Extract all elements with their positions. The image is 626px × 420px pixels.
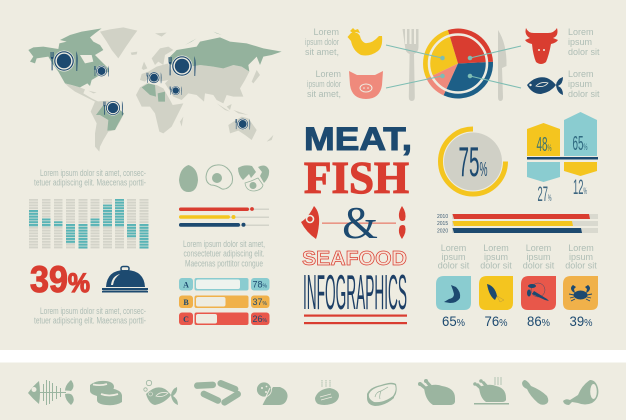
- squid card: dolor sit: [480, 260, 512, 270]
- title: ampersand with fish: &: [342, 197, 378, 248]
- squid card: [479, 243, 513, 329]
- icon: fish with bubbles: [144, 380, 178, 405]
- icon: raw steak: [367, 383, 397, 406]
- hexagon chart: 27%: [538, 183, 552, 206]
- icon: fork: [402, 29, 418, 101]
- text block: lower left: [34, 306, 146, 326]
- text block: middle: Lorem ipsum dolor sit amet,: [183, 239, 265, 249]
- icon: fish: [527, 77, 563, 95]
- row A meter: A: [183, 280, 189, 290]
- text block: middle: [183, 239, 265, 268]
- icon: salami: [256, 382, 288, 405]
- labels: chicken: Lorem: [313, 27, 339, 37]
- crab card: Lorem: [568, 243, 594, 253]
- text block: lower left: tetuer adipiscing elit. Maecenas portti-: [34, 316, 146, 326]
- row A meter: [179, 278, 270, 290]
- white band: [0, 350, 626, 362]
- shrimp card: 65%: [442, 313, 465, 329]
- crab card: dolor sit: [565, 260, 597, 270]
- year bars chart: [437, 214, 598, 234]
- squid card: 76%: [484, 313, 508, 329]
- icon: sausages: [194, 379, 242, 407]
- crab card: [563, 243, 598, 329]
- icon: fish steaks: [90, 381, 122, 405]
- donut chart 75%: 75%: [458, 138, 488, 185]
- icon: roast chicken: [418, 379, 455, 405]
- donut chart 75%: [440, 129, 506, 194]
- title: fish: FISH: [304, 153, 409, 203]
- icon: pig: [349, 71, 383, 99]
- year bars chart: 2010: [437, 214, 448, 220]
- lobster card: 86%: [527, 313, 550, 329]
- equalizer bar chart: [29, 199, 148, 249]
- lobster card: ipsum: [526, 252, 551, 262]
- lobster card: Lorem: [526, 243, 551, 253]
- title: seafood: SEAFOOD: [302, 248, 407, 270]
- hexagon chart: 65%: [572, 133, 588, 155]
- shrimp card: ipsum: [441, 252, 466, 262]
- icon: steak with steam: [315, 380, 339, 405]
- big stat 39%: 39%: [30, 259, 90, 300]
- hexagon chart: [527, 112, 598, 206]
- icon: knife: [498, 30, 507, 101]
- text block: middle: Maecenas porttitor congue: [185, 258, 263, 268]
- title: meat: MEAT,: [304, 121, 412, 157]
- icon: fish skeleton: [28, 380, 74, 405]
- labels: pig: [307, 69, 341, 99]
- year bars chart: 2020: [437, 228, 448, 234]
- row A meter: 78%: [252, 280, 268, 290]
- icon: serving cloche: [102, 266, 148, 292]
- crab card: ipsum: [569, 252, 593, 262]
- squid card: ipsum: [484, 252, 508, 262]
- labels: cow: dolor sit: [568, 47, 600, 57]
- text block: upper left: [34, 168, 146, 188]
- icon: drumstick: [522, 380, 548, 405]
- squid card: Lorem: [483, 243, 509, 253]
- connector lines: [386, 45, 521, 88]
- hexagon chart: 48%: [536, 134, 552, 156]
- labels: pig: ipsum dolor: [307, 79, 341, 89]
- labels: fish: dolor sit: [568, 89, 600, 99]
- labels: fish: Lorem: [568, 69, 594, 79]
- hexagon chart: 12%: [573, 176, 587, 199]
- shrimp card: Lorem: [441, 243, 466, 253]
- icon: ham: [563, 380, 598, 405]
- labels: chicken: [305, 27, 339, 57]
- shrimp card: [436, 243, 471, 329]
- text block: upper left: tetuer adipiscing elit. Maecenas portti-: [34, 178, 146, 188]
- labels: cow: Lorem: [568, 27, 594, 37]
- shrimp card: dolor sit: [438, 260, 470, 270]
- title rules: [304, 314, 407, 324]
- text block: lower left: Lorem ipsum dolor sit amet, consec-: [40, 306, 146, 316]
- year bars chart: 2015: [437, 221, 448, 227]
- row B meter: [179, 296, 270, 308]
- pie chart plate: [423, 28, 493, 99]
- text block: upper left: Lorem ipsum dolor sit amet, consec-: [40, 168, 146, 178]
- icon: chicken on a plate: [473, 377, 509, 404]
- lobster card: [521, 243, 556, 329]
- icon: cow: [525, 28, 558, 64]
- text block: middle: consectetuer adipiscing elit.: [184, 248, 264, 258]
- labels: fish: [568, 69, 600, 99]
- labels: chicken: sit amet,: [305, 47, 339, 57]
- labels: cow: ipsum: [568, 37, 592, 47]
- title: ampersand with fish: [301, 197, 406, 248]
- world map: [28, 27, 282, 152]
- icon: broken egg: [238, 165, 269, 191]
- plate markers on map: [51, 50, 250, 130]
- row C meter: 26%: [252, 314, 268, 324]
- labels: cow: [568, 27, 600, 57]
- row C meter: C: [183, 315, 189, 324]
- icon: fried egg: [206, 165, 233, 189]
- row B meter: 37%: [252, 297, 268, 307]
- row B meter: B: [183, 298, 189, 307]
- lobster card: dolor sit: [523, 260, 555, 270]
- labels: fish: ipsum: [568, 79, 592, 89]
- icon: egg: [179, 165, 198, 192]
- icon: chicken: [348, 28, 382, 56]
- labels: chicken: ipsum dolor: [305, 37, 339, 47]
- line progress chart: [179, 207, 269, 227]
- labels: pig: Lorem: [315, 69, 341, 79]
- row C meter: [179, 312, 270, 325]
- labels: pig: sit amet,: [307, 89, 341, 99]
- crab card: 39%: [570, 313, 593, 329]
